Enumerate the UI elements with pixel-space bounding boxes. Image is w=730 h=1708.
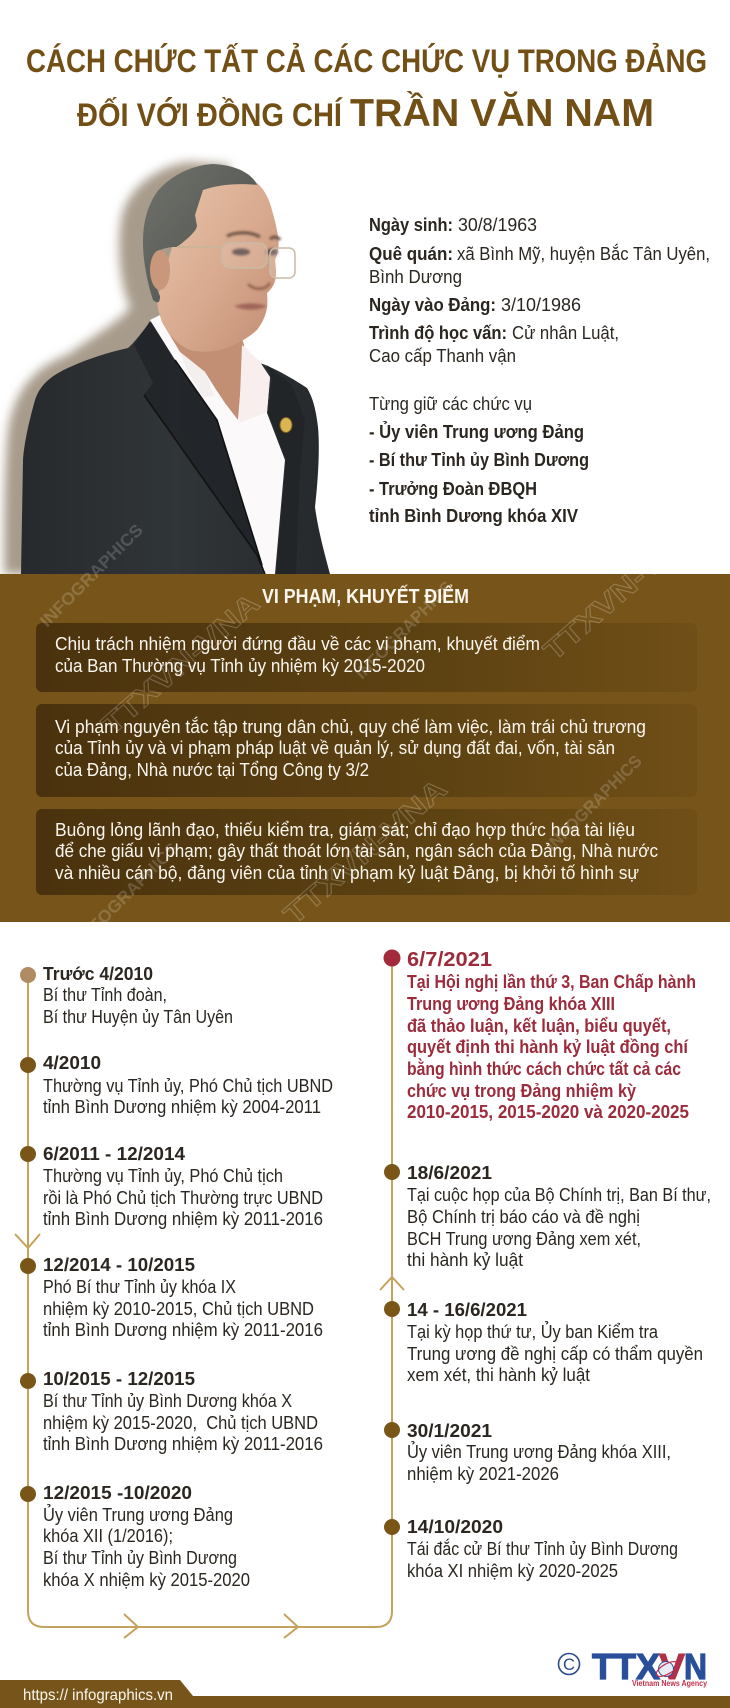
violation card 2: của Tỉnh ủy và vi phạm pháp luật về quản lý, sử dụng đất đai, vốn, tài sản xyxy=(55,737,615,758)
footer bar with url: https:// infographics.vn xyxy=(23,1687,173,1704)
entry: before 4/2010: Trước 4/2010 xyxy=(43,963,153,984)
entry: 12/2015 - 10/2020: Ủy viên Trung ương Đảng xyxy=(43,1504,233,1525)
entry: 14 - 16/6/2021: Trung ương đề nghị cấp có thẩm quyền xyxy=(407,1343,703,1364)
entry: 14/10/2020 xyxy=(384,1516,678,1581)
violation card 2: của Đảng, Nhà nước tại Tổng Công ty 3/2 xyxy=(55,759,369,780)
former positions xyxy=(369,393,589,526)
entry: 6/7/2021 highlighted xyxy=(384,949,696,1122)
entry: 6/2011 - 12/2014: rồi là Phó Chủ tịch Thường trực UBND xyxy=(43,1187,323,1208)
entry: 30/1/2021: 30/1/2021 xyxy=(407,1420,492,1441)
heading: violations: VI PHẠM, KHUYẾT ĐIỂM xyxy=(262,585,469,608)
profile facts: 3/10/1986 xyxy=(501,294,581,315)
violation card 2 xyxy=(36,704,697,797)
entry: 6/7/2021 highlighted: quyết định thi hành kỷ luật đồng chí xyxy=(407,1036,689,1057)
profile facts: Cử nhân Luật, xyxy=(512,322,619,343)
profile facts: Ngày sinh: xyxy=(369,214,453,235)
profile facts: Trình độ học vấn: xyxy=(369,322,507,343)
logo: TTXVN: C xyxy=(563,1655,575,1674)
watermarks: INFOGRAPHICS xyxy=(351,577,457,683)
entry: before 4/2010: Bí thư Tỉnh đoàn, xyxy=(43,984,167,1005)
former positions: - Trưởng Đoàn ĐBQH xyxy=(369,478,537,499)
profile facts: 30/8/1963 xyxy=(458,214,537,235)
entry: 6/2011 - 12/2014: Thường vụ Tỉnh ủy, Phó Chủ tịch xyxy=(43,1165,283,1186)
violation card 3 xyxy=(36,809,697,895)
watermarks xyxy=(40,524,656,922)
entry: 6/2011 - 12/2014: tỉnh Bình Dương nhiệm kỳ 2011-2016 xyxy=(43,1208,323,1229)
logo: TTXVN: Vietnam News Agency xyxy=(632,1679,707,1688)
former positions: Từng giữ các chức vụ xyxy=(369,393,532,414)
logo: TTXVN xyxy=(558,1646,707,1688)
violation card 1 xyxy=(36,623,697,692)
right timeline xyxy=(384,949,711,1581)
timeline path with arrows xyxy=(15,958,404,1638)
entry: before 4/2010: Bí thư Huyện ủy Tân Uyên xyxy=(43,1006,233,1027)
entry: 6/7/2021 highlighted: 6/7/2021 xyxy=(407,949,492,971)
entry: 14 - 16/6/2021 xyxy=(384,1299,703,1385)
watermarks: INFOGRAPHICS xyxy=(73,839,182,948)
watermarks: TTXVN-VNA xyxy=(278,773,453,931)
former positions: tỉnh Bình Dương khóa XIV xyxy=(369,505,579,526)
former positions: - Ủy viên Trung ương Đảng xyxy=(369,421,584,442)
entry: 6/7/2021 highlighted: bằng hình thức cách chức tất cả các xyxy=(407,1058,681,1079)
profile facts: Quê quán: xyxy=(369,243,453,264)
watermarks: INFOGRAPHICS xyxy=(36,521,147,631)
violation card 1: của Ban Thường vụ Tỉnh ủy nhiệm kỳ 2015-2020 xyxy=(55,655,425,676)
entry: 14/10/2020: khóa XI nhiệm kỳ 2020-2025 xyxy=(407,1560,618,1581)
violation card 2: Vi phạm nguyên tắc tập trung dân chủ, quy chế làm việc, làm trái chủ trương xyxy=(55,716,646,737)
entry: 14 - 16/6/2021: Tại kỳ họp thứ tư, Ủy ban Kiểm tra xyxy=(407,1321,659,1342)
entry: 10/2015 - 12/2015: Bí thư Tỉnh ủy Bình Dương khóa X xyxy=(43,1390,292,1411)
entry: 18/6/2021: 18/6/2021 xyxy=(407,1162,492,1183)
former positions: - Bí thư Tỉnh ủy Bình Dương xyxy=(369,449,589,470)
entry: 12/2015 - 10/2020 xyxy=(20,1482,250,1590)
logo: TTXVN: N xyxy=(684,1646,707,1687)
entry: 4/2010: Thường vụ Tỉnh ủy, Phó Chủ tịch UBND xyxy=(43,1075,333,1096)
violation card 1: Chịu trách nhiệm người đứng đầu về các vi phạm, khuyết điểm xyxy=(55,633,540,654)
entry: 30/1/2021 xyxy=(384,1420,671,1484)
entry: 14/10/2020: Tái đắc cử Bí thư Tỉnh ủy Bình Dương xyxy=(407,1538,678,1559)
entry: 6/2011 - 12/2014: 6/2011 - 12/2014 xyxy=(43,1143,186,1164)
entry: 4/2010 xyxy=(20,1052,333,1117)
entry: 14 - 16/6/2021: xem xét, thi hành kỷ luật xyxy=(407,1364,590,1385)
entry: 6/7/2021 highlighted: Trung ương Đảng khóa XIII xyxy=(407,993,615,1014)
watermarks: TTXVN-VNA xyxy=(96,587,265,741)
watermarks: INFOGRAPHICS xyxy=(542,752,646,855)
entry: 10/2015 - 12/2015: 10/2015 - 12/2015 xyxy=(43,1368,195,1389)
entry: 30/1/2021: nhiệm kỳ 2021-2026 xyxy=(407,1463,559,1484)
title: ĐỐI VỚI ĐỒNG CHÍ xyxy=(77,97,343,133)
entry: 4/2010: 4/2010 xyxy=(43,1052,101,1073)
violation card 3: Buông lỏng lãnh đạo, thiếu kiểm tra, giám sát; chỉ đạo hợp thức hóa tài liệu xyxy=(55,819,635,840)
entry: 12/2014 - 10/2015: Phó Bí thư Tỉnh ủy khóa IX xyxy=(43,1276,236,1297)
entry: 14/10/2020: 14/10/2020 xyxy=(407,1516,503,1537)
logo: TTXVN: TTX xyxy=(592,1646,660,1687)
entry: 12/2014 - 10/2015: 12/2014 - 10/2015 xyxy=(43,1254,195,1275)
entry: 12/2015 - 10/2020: khóa X nhiệm kỳ 2015-2020 xyxy=(43,1569,250,1590)
profile facts: Bình Dương xyxy=(369,266,462,287)
entry: 18/6/2021 xyxy=(384,1162,711,1270)
entry: 18/6/2021: BCH Trung ương Đảng xem xét, xyxy=(407,1228,641,1249)
profile facts: xã Bình Mỹ, huyện Bắc Tân Uyên, xyxy=(457,243,710,264)
entry: 10/2015 - 12/2015: nhiệm kỳ 2015-2020, Chủ tịch UBND xyxy=(43,1412,318,1433)
footer bar with url xyxy=(0,1680,730,1708)
profile facts xyxy=(369,214,710,366)
violation card 3: và nhiều cán bộ, đảng viên của tỉnh vi phạm kỷ luật Đảng, bị khởi tố hình sự xyxy=(55,862,639,883)
entry: 12/2015 - 10/2020: khóa XII (1/2016); xyxy=(43,1525,173,1546)
entry: 6/7/2021 highlighted: chức vụ trong Đảng nhiệm kỳ xyxy=(407,1080,637,1101)
left timeline xyxy=(20,963,333,1590)
profile facts: Cao cấp Thanh vận xyxy=(369,345,516,366)
entry: 14 - 16/6/2021: 14 - 16/6/2021 xyxy=(407,1299,527,1320)
entry: 18/6/2021: Bộ Chính trị báo cáo và đề nghị xyxy=(407,1206,640,1227)
logo: TTXVN: V xyxy=(659,1646,685,1687)
entry: 10/2015 - 12/2015 xyxy=(20,1368,323,1454)
panel: violations xyxy=(0,574,730,922)
watermarks: TTXVN-VNA xyxy=(538,513,707,667)
entry: 12/2015 - 10/2020: Bí thư Tỉnh ủy Bình Dương xyxy=(43,1547,237,1568)
portrait photo xyxy=(4,162,330,574)
entry: 30/1/2021: Ủy viên Trung ương Đảng khóa XIII, xyxy=(407,1441,671,1462)
entry: before 4/2010 xyxy=(20,963,233,1027)
entry: 12/2014 - 10/2015: tỉnh Bình Dương nhiệm kỳ 2011-2016 xyxy=(43,1319,323,1340)
entry: 10/2015 - 12/2015: tỉnh Bình Dương nhiệm kỳ 2011-2016 xyxy=(43,1433,323,1454)
violation card 3: để che giấu vi phạm; gây thất thoát lớn tài sản, ngân sách của Đảng, Nhà nước xyxy=(55,840,658,861)
entry: 12/2015 - 10/2020: 12/2015 -10/2020 xyxy=(43,1482,192,1503)
entry: 6/2011 - 12/2014 xyxy=(20,1143,323,1229)
entry: 12/2014 - 10/2015: nhiệm kỳ 2010-2015, Chủ tịch UBND xyxy=(43,1298,314,1319)
profile facts: Ngày vào Đảng: xyxy=(369,294,496,315)
title xyxy=(26,43,707,135)
entry: 6/7/2021 highlighted: 2010-2015, 2015-2020 và 2020-2025 xyxy=(407,1101,689,1122)
title: TRẦN VĂN NAM xyxy=(350,91,654,135)
entry: 12/2014 - 10/2015 xyxy=(20,1254,323,1340)
entry: 18/6/2021: thi hành kỷ luật xyxy=(407,1249,523,1270)
entry: 4/2010: tỉnh Bình Dương nhiệm kỳ 2004-2011 xyxy=(43,1096,321,1117)
entry: 6/7/2021 highlighted: đã thảo luận, kết luận, biểu quyết, xyxy=(407,1015,671,1036)
